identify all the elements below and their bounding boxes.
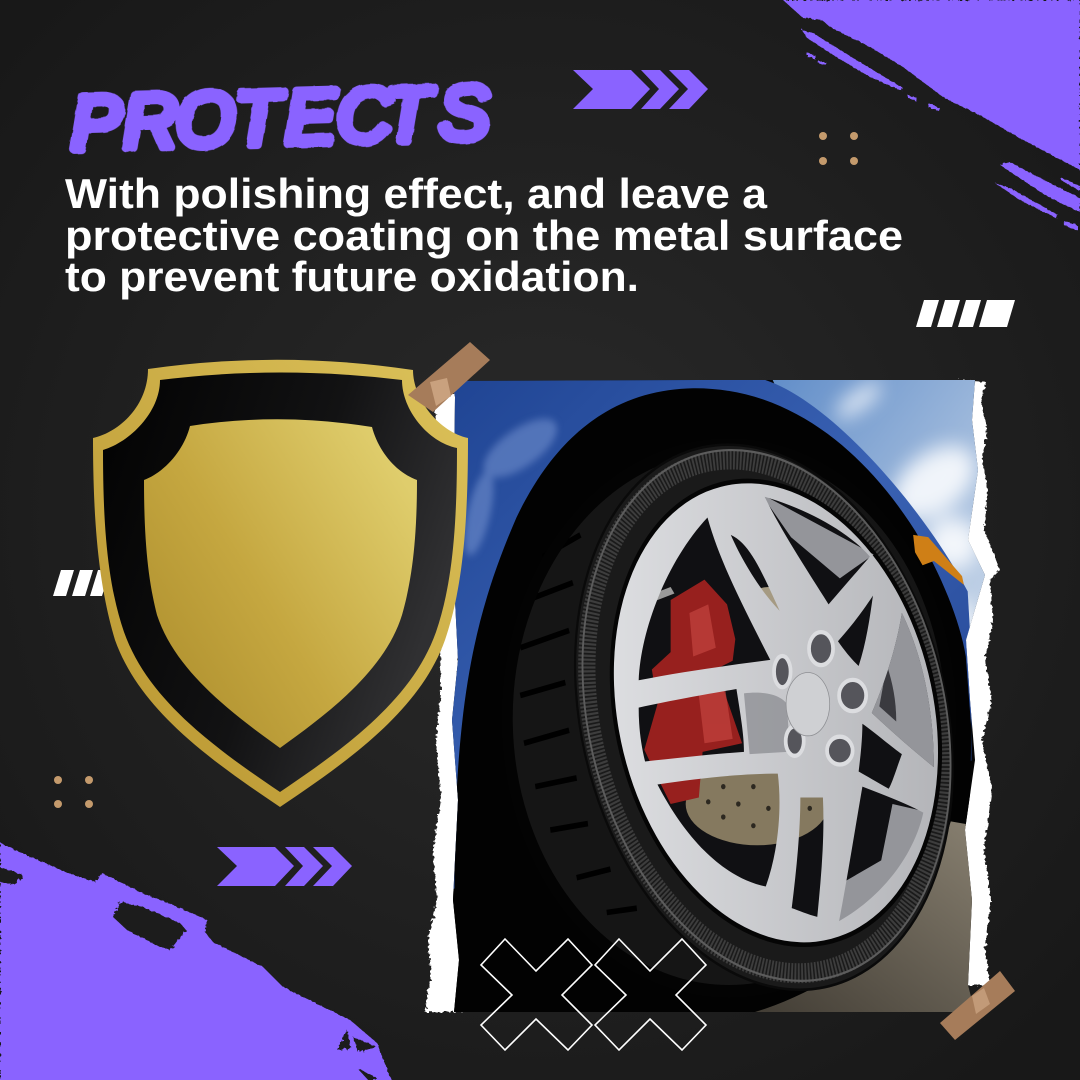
X outlines (481, 939, 706, 1050)
dots: top (819, 132, 858, 165)
brush: bottom left purple (0, 843, 393, 1080)
hub shading (744, 693, 789, 754)
barrel (761, 494, 934, 930)
tape: bottom right (940, 971, 1015, 1040)
valve (657, 587, 674, 600)
wheel interior (638, 498, 916, 916)
icon: gold shield (93, 360, 468, 807)
arrows: bottom chevrons (217, 847, 352, 886)
sky (772, 380, 985, 718)
ground (755, 821, 972, 1012)
hub cap (786, 672, 830, 736)
stripes: right (916, 300, 1015, 327)
sidewall (574, 446, 954, 991)
body highlights (464, 416, 560, 557)
tape: top (408, 342, 490, 412)
car body (445, 379, 971, 891)
brake disc (686, 587, 829, 845)
torn white paper behind photo (425, 380, 1000, 1012)
red caliper (644, 580, 742, 804)
rim and spokes (614, 483, 938, 942)
dots: lower left (54, 776, 93, 808)
title: PROTECTS (70, 71, 491, 166)
arrows: top chevrons (573, 70, 708, 109)
lug holes (774, 632, 866, 765)
photo: car wheel (452, 380, 985, 1012)
stripes: left (53, 570, 110, 596)
body text (65, 170, 903, 300)
brush: top right purple (783, 0, 1080, 231)
wheel arch (430, 388, 971, 1012)
body text: to prevent future oxidation. (65, 253, 639, 300)
tyre (507, 445, 951, 991)
indicator (913, 535, 964, 585)
body text: protective coating on the metal surface (65, 212, 903, 259)
tread grooves (507, 445, 951, 991)
body text: With polishing effect, and leave a (65, 170, 768, 217)
